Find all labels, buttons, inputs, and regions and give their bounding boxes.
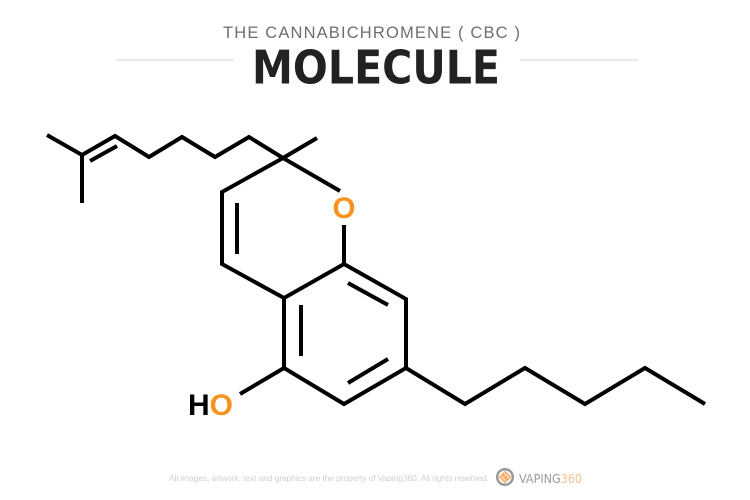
- pentyl tail: [406, 368, 705, 404]
- methyl bond: [80, 155, 84, 203]
- title rules: [116, 59, 638, 61]
- title: MOLECULE: [252, 40, 500, 94]
- hydroxyl label: HO: [188, 389, 233, 422]
- bonds: skeleton: [47, 135, 705, 404]
- benzene ring: [284, 264, 406, 404]
- ring oxygen label: O: [332, 192, 356, 225]
- logo wordmark: VAPING360: [519, 472, 582, 486]
- benzene double bonds: [299, 305, 303, 356]
- molecule diagram: [47, 135, 705, 422]
- side chain: [47, 135, 317, 158]
- logo icon: [497, 469, 513, 485]
- footer copyright: All images, artwork, text and graphics are the property of Vaping360. All rights reserved.: [169, 473, 489, 483]
- subtitle: THE CANNABICHROMENE ( CBC ): [223, 24, 520, 42]
- hydroxyl bond: [240, 368, 284, 394]
- chain double bond: [90, 146, 117, 161]
- pyran double bond: [235, 203, 239, 254]
- footer logo: [497, 469, 582, 486]
- ring oxygen bond: [342, 225, 346, 264]
- pyran ring: [222, 158, 340, 298]
